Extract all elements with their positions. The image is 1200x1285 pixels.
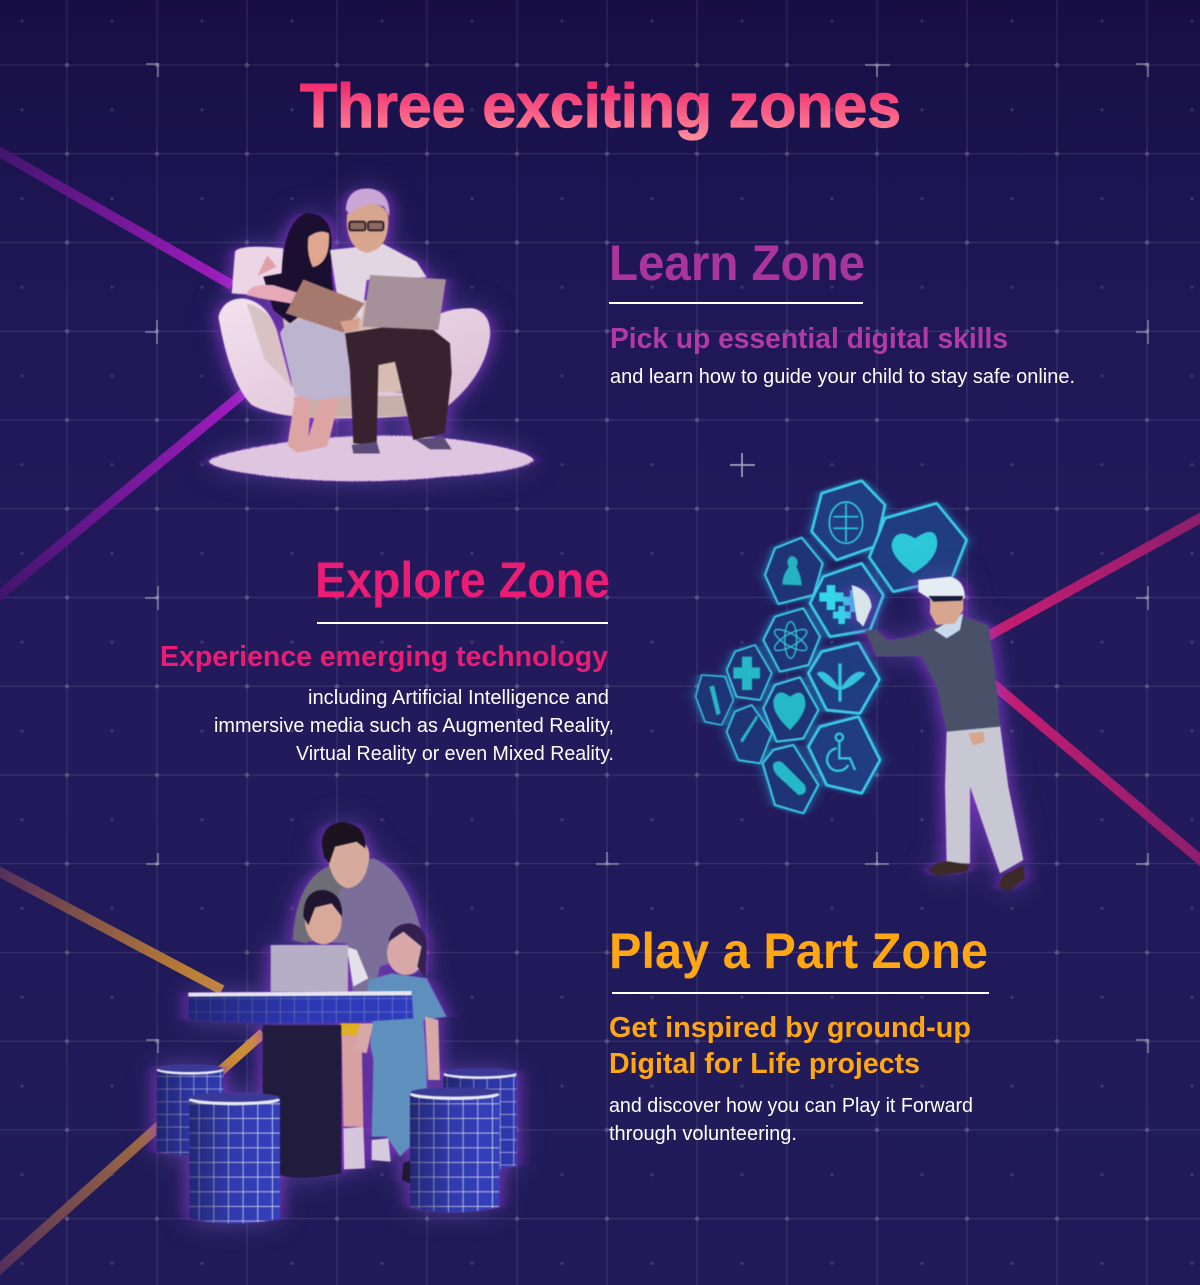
hexagon: crosses: [810, 563, 883, 637]
collar: [934, 613, 963, 638]
illustration: senior man with VR headset: [852, 577, 1025, 892]
stool front right: [410, 1087, 499, 1212]
hexagon icons: [709, 532, 937, 795]
body text: Virtual Reality or even Mixed Reality.: [296, 743, 614, 765]
panel: play a part zone text: [609, 923, 989, 1145]
title: Three exciting zones: [300, 72, 901, 141]
hexagon: syringe: [727, 705, 772, 763]
subheading: Get inspired by ground-up: [609, 1012, 971, 1044]
head and headset: [930, 598, 963, 625]
stool back left: [157, 1065, 223, 1155]
corner brackets and crosshair marks: [145, 64, 1148, 1053]
stool front left: [189, 1093, 280, 1223]
table top: [188, 991, 413, 1023]
illustration: family at tiled table: [157, 822, 517, 1223]
hexagon: caduceus: [808, 643, 879, 713]
sweater: [865, 617, 1000, 732]
body text: including Artificial Intelligence and: [308, 687, 609, 709]
divider: [612, 992, 989, 994]
boy: [303, 890, 368, 987]
rug: [208, 436, 534, 481]
stool back right: [443, 1068, 517, 1170]
body text: [609, 1095, 973, 1145]
heading: Play a Part Zone: Play a Part Zone: [609, 923, 988, 979]
hexagon: person: [765, 538, 823, 604]
hexagon: vial: [696, 675, 733, 725]
body text: and learn how to guide your child to stay safe online.: [610, 366, 1075, 388]
heading: Explore Zone: Explore Zone: [315, 552, 610, 608]
subheading: Experience emerging technology: [160, 641, 608, 673]
table base: [263, 1025, 341, 1178]
illustration: grandfather and girl on armchair: [208, 188, 534, 481]
illustration: hexagon medical holograms: [696, 481, 967, 813]
hexagon: brain: [812, 481, 885, 560]
hand: [852, 585, 872, 627]
hexagon: atom: [763, 608, 820, 672]
father: [293, 822, 427, 1169]
panel: learn zone text: [609, 235, 1075, 388]
girl: [247, 213, 352, 453]
hexagon: plus: [727, 645, 772, 700]
hexagon: heart rate: [869, 503, 967, 592]
body text: and discover how you can Play it Forward: [609, 1095, 973, 1117]
shoes: [928, 861, 970, 876]
hexagon: wheelchair: [808, 717, 880, 793]
body text: immersive media such as Augmented Reality,: [214, 715, 614, 737]
panel: explore zone text: [160, 552, 614, 765]
heading: Learn Zone: Learn Zone: [609, 235, 865, 291]
hexagon: heart with cross: [763, 677, 818, 742]
girl in denim overalls: [353, 923, 447, 1183]
subheading: [609, 1012, 971, 1080]
divider: [609, 302, 863, 304]
body text: through volunteering.: [609, 1123, 797, 1145]
grandfather: [286, 188, 452, 453]
trousers: [945, 725, 1023, 873]
armchair: [218, 247, 490, 418]
subheading: Pick up essential digital skills: [610, 323, 1008, 355]
hexagon: bandage: [763, 745, 818, 813]
divider: [317, 622, 608, 624]
subheading: Digital for Life projects: [609, 1048, 920, 1080]
laptop: [271, 945, 348, 992]
body text: [214, 687, 614, 765]
